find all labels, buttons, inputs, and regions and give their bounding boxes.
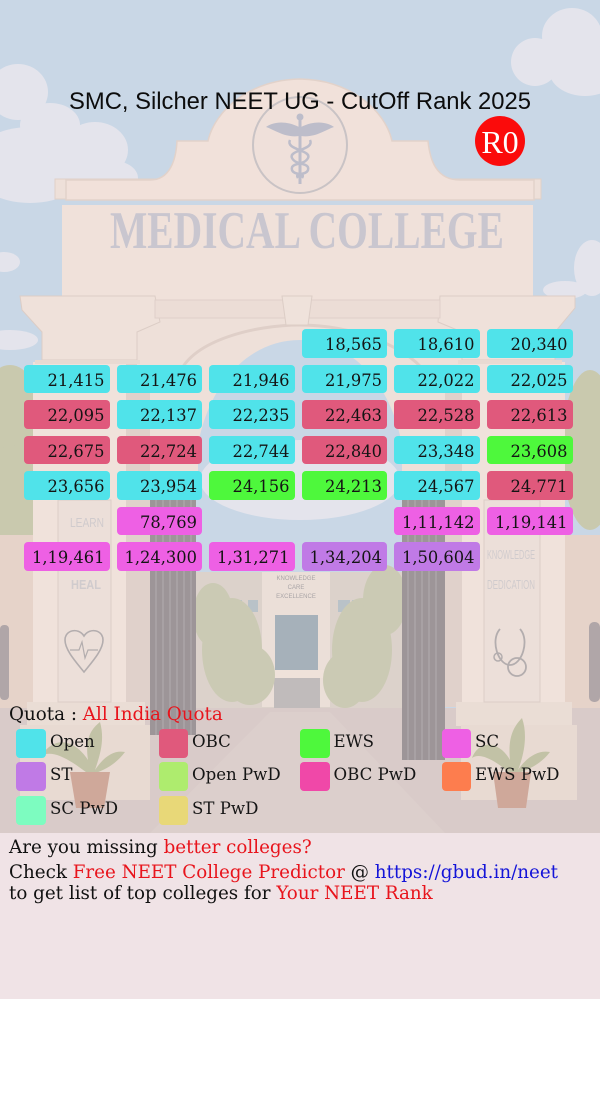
heart icon (65, 631, 103, 672)
background illustration: medical college gate: KNOWLEDGE (487, 547, 535, 562)
cutoff rank grid: 22,137 (140, 406, 197, 425)
cutoff rank grid: 22,528 (418, 406, 474, 425)
left pillar (33, 362, 126, 707)
round badge R0: R0 (481, 124, 519, 160)
cutoff rank grid: 1,50,604 (402, 548, 474, 567)
promo link line: Check Free NEET College Predictor @ https://gbud.in/neet (9, 862, 558, 883)
cutoff rank grid: 24,567 (418, 477, 474, 496)
legend: OBC PwD (334, 765, 416, 784)
legend: Open PwD (192, 765, 281, 784)
gates (150, 500, 196, 735)
inner trees (193, 565, 407, 708)
medallion with caduceus (253, 97, 347, 193)
cutoff rank grid: 24,213 (325, 477, 382, 496)
planter right (472, 718, 550, 775)
cutoff rank grid: 24,156 (233, 477, 290, 496)
legend: ST PwD (192, 798, 258, 818)
cutoff rank grid: 18,610 (418, 335, 474, 354)
cutoff rank grid: 21,415 (48, 370, 104, 390)
cutoff rank grid: 22,744 (233, 442, 290, 460)
stethoscope icon (495, 629, 525, 665)
legend (16, 729, 559, 825)
cutoff rank grid: 22,840 (325, 442, 382, 460)
arch (137, 296, 462, 480)
cutoff rank grid: 21,946 (233, 370, 290, 390)
cutoff rank grid: 20,340 (511, 335, 568, 354)
background illustration: medical college gate: EXCELLENCE (276, 594, 316, 600)
clouds (0, 8, 600, 520)
legend: SC PwD (50, 798, 118, 818)
legend: EWS PwD (475, 765, 559, 784)
background illustration: medical college gate: LEARN (70, 515, 104, 530)
cutoff rank grid: 78,769 (140, 512, 197, 532)
distant building (196, 572, 402, 712)
ground (0, 708, 600, 833)
cutoff rank grid: 1,31,271 (217, 548, 290, 567)
cutoff rank grid: 22,613 (511, 406, 568, 425)
legend: EWS (334, 732, 374, 751)
cutoff rank grid: 1,19,461 (32, 548, 104, 567)
side trees (0, 365, 600, 555)
cutoff rank grid: 22,235 (233, 406, 290, 425)
panel: college predictor promo (0, 833, 600, 999)
right pillar (462, 362, 565, 707)
cutoff rank grid: 24,771 (511, 477, 568, 496)
cutoff rank grid: 22,095 (48, 406, 104, 425)
cornice (20, 296, 160, 360)
cutoff rank grid: 22,675 (48, 442, 104, 460)
cutoff rank grid: 22,724 (140, 442, 197, 460)
upper gate (62, 205, 533, 300)
background illustration: medical college gate: KNOWLEDGE (276, 576, 316, 582)
background illustration: medical college gate: DEDICATION (487, 577, 535, 592)
side buildings (0, 535, 36, 720)
cutoff rank grid: 1,19,141 (495, 512, 568, 532)
cutoff rank grid: 1,34,204 (309, 548, 382, 567)
legend: OBC (192, 732, 231, 751)
planter left (42, 722, 125, 775)
background illustration: medical college gate: HEAL (71, 577, 101, 592)
cutoff rank grid: 1,11,142 (402, 512, 474, 532)
title: SMC, Silcher NEET UG - CutOff Rank 2025 (69, 88, 531, 115)
cutoff rank grid: 23,348 (418, 442, 474, 460)
legend: SC (475, 732, 499, 751)
cutoff rank grid: 22,022 (418, 370, 474, 390)
legend: ST (50, 765, 72, 784)
promo headline: Are you missing better colleges? (9, 837, 312, 858)
round badge R0 (475, 116, 525, 166)
background illustration: medical college gate: CARE (288, 585, 304, 591)
cutoff rank grid: 23,954 (140, 477, 197, 496)
quota heading: Quota : All India Quota (9, 704, 223, 725)
legend: Open (50, 732, 95, 751)
cutoff rank grid: 23,656 (48, 477, 104, 496)
cutoff rank grid: 18,565 (325, 335, 382, 354)
cutoff rank grid: 21,476 (140, 370, 197, 390)
cutoff rank grid: 23,608 (511, 442, 568, 460)
cutoff rank grid: 22,025 (511, 370, 568, 390)
cutoff rank grid: 1,24,300 (124, 548, 197, 567)
cutoff rank grid: 22,463 (325, 406, 382, 425)
cutoff rank grid (24, 329, 573, 571)
promo rank line: to get list of top colleges for Your NEET Rank (9, 883, 433, 904)
cutoff rank grid: 21,975 (325, 370, 382, 390)
